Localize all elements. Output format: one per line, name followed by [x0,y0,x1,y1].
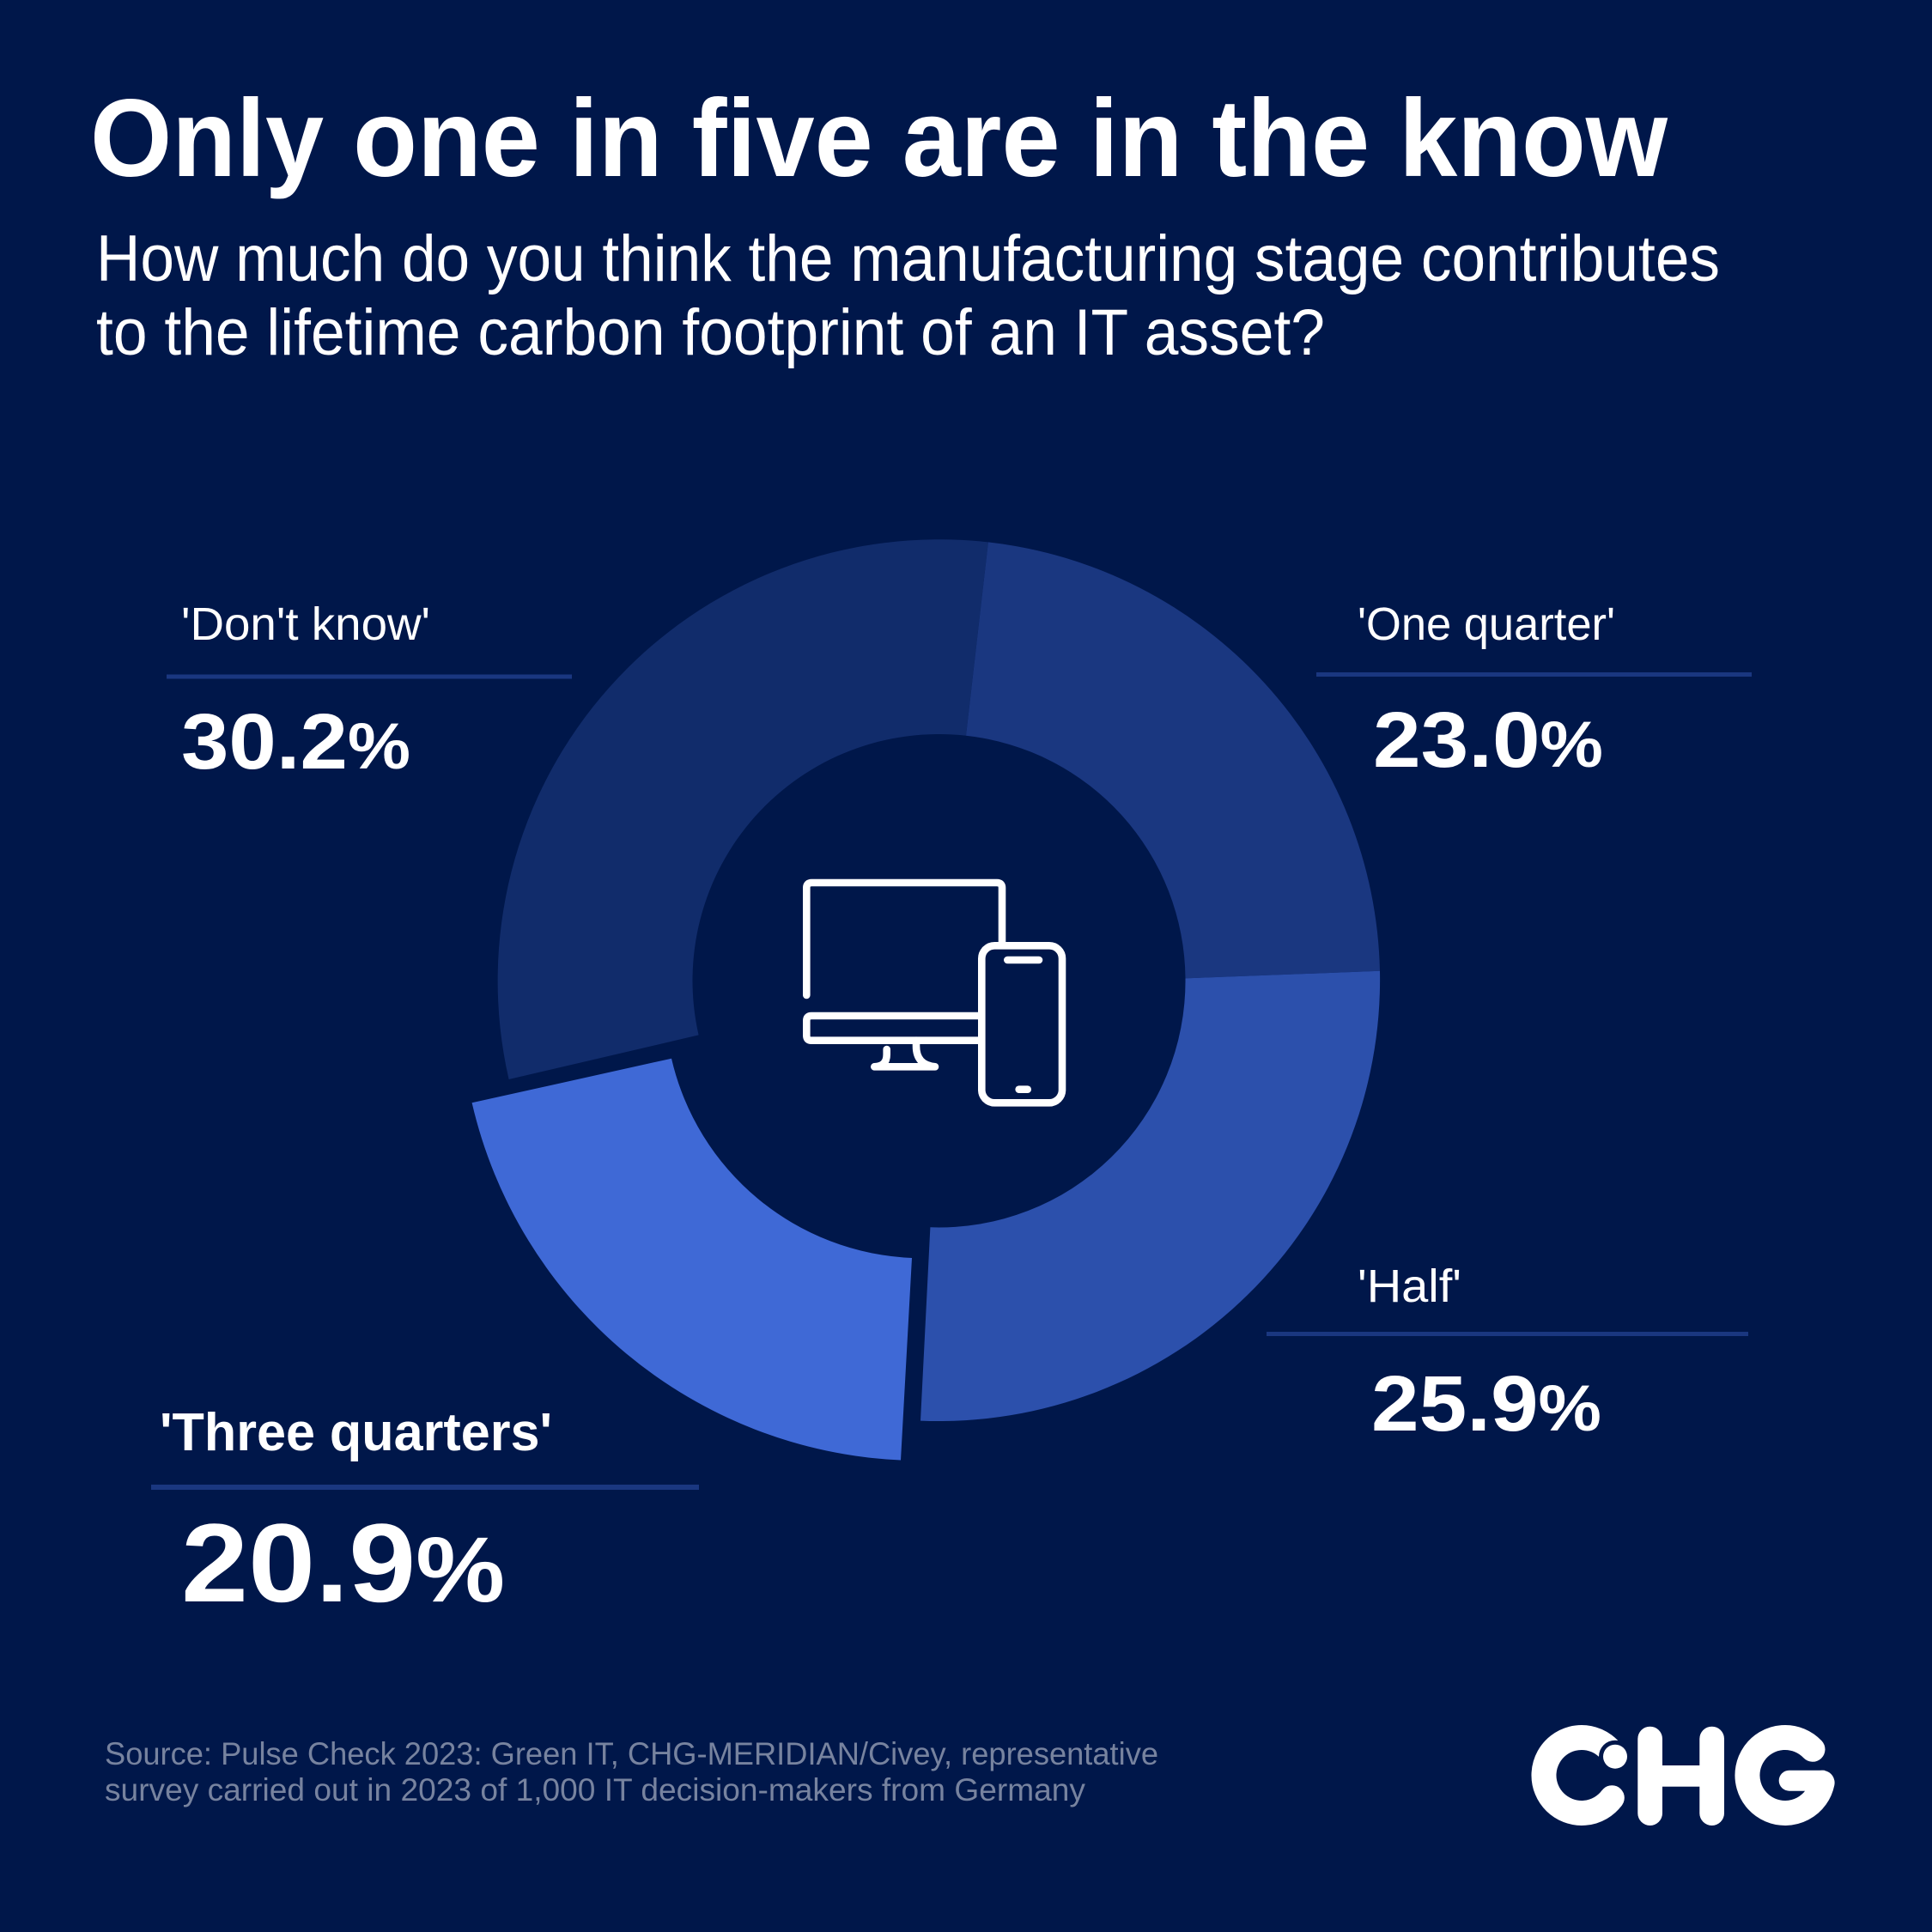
label: One quarter [1316,598,1752,784]
segment: Half [920,971,1380,1421]
segment: One quarter [966,542,1380,978]
label: One quarter: 23.0% [1373,696,1603,784]
subtitle: How much do you think the manufacturing stage contributes [96,222,1720,295]
segment: Don't know [498,539,988,1079]
label: Don't know: 'Don't know' [181,598,430,650]
logo: CHG [1544,1727,1825,1826]
donut chart [472,539,1380,1460]
source note [105,1736,1158,1807]
label: Three quarters: 20.9% [181,1500,505,1625]
label: Half [1267,1261,1748,1448]
segment: Three quarters [472,1059,912,1460]
label: Don't know: 30.2% [181,698,410,786]
subtitle [96,222,1720,369]
label: Don't know [167,598,572,786]
source note: Source: Pulse Check 2023: Green IT, CHG-MERIDIAN/Civey, representative [105,1736,1158,1771]
label: Three quarters [151,1403,699,1625]
subtitle: to the lifetime carbon footprint of an IT asset? [96,296,1325,369]
label: Half: 'Half' [1358,1261,1461,1312]
icon: monitor and smartphone [806,883,1062,1103]
source note: survey carried out in 2023 of 1,000 IT decision-makers from Germany [105,1772,1085,1807]
label: Half: 25.9% [1371,1360,1601,1448]
label: One quarter: 'One quarter' [1358,598,1615,650]
label: Three quarters: 'Three quarters' [160,1403,552,1462]
title: Only one in five are in the know [90,77,1668,200]
